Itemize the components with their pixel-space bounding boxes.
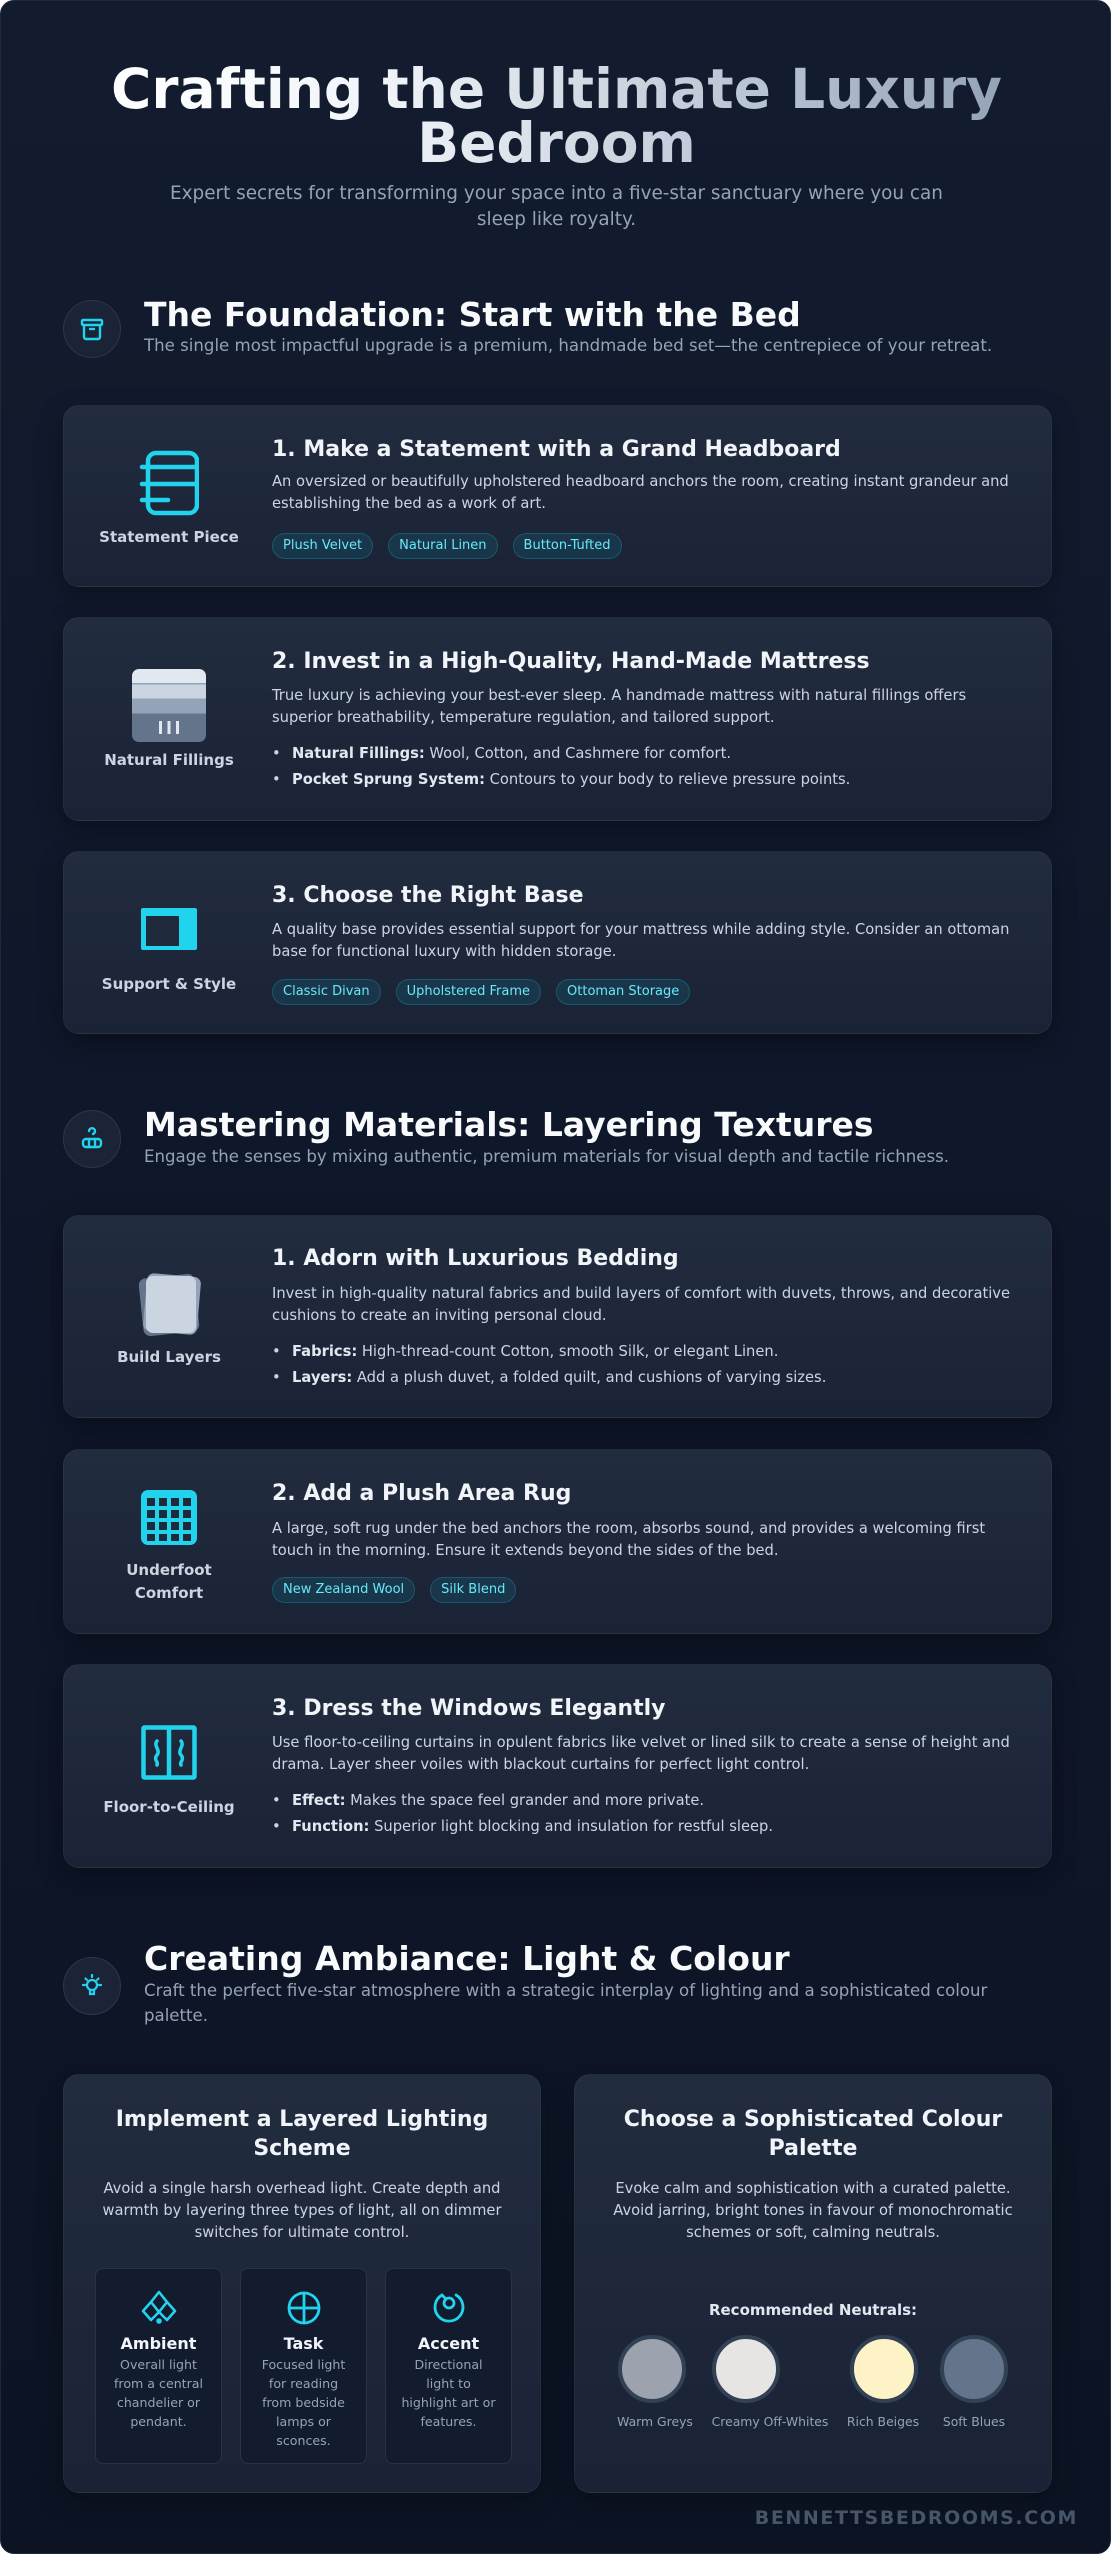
icon: section 1 archive box <box>63 300 121 358</box>
card title: 2. Invest in a High-Quality, Hand-Made Mattress <box>272 649 870 674</box>
heading: section 3: Creating Ambiance: Light & Colour <box>144 1939 790 1978</box>
panel title: Choose a Sophisticated Colour <box>624 2107 1002 2132</box>
label: Support & Style <box>102 975 236 993</box>
swatch: soft blues <box>940 2335 1008 2403</box>
text: section 2 subtitle: Engage the senses by mixing authentic, premium materials for visual depth and tactile richness. <box>144 1147 949 1166</box>
text: features. <box>420 2414 477 2429</box>
description: superior breathability, temperature regulation, and tailored support. <box>272 709 775 726</box>
text: section 3 subtitle: Craft the perfect five-star atmosphere with a strategic interplay of lighting and a sophisticated colour <box>144 1981 987 2000</box>
card title: 1. Adorn with Luxurious Bedding <box>272 1246 679 1271</box>
swatch: warm greys <box>618 2335 686 2403</box>
tags: Plush Velvet <box>283 538 362 553</box>
bullets <box>274 1343 826 1386</box>
description <box>272 1734 1010 1773</box>
icon: rug <box>141 1490 197 1545</box>
label: Ambient <box>121 2334 196 2353</box>
panel description: Avoid a single harsh overhead light. Create depth and <box>104 2180 500 2197</box>
subtitle <box>170 183 943 230</box>
card title: 3. Choose the Right Base <box>272 883 584 908</box>
label: Comfort <box>135 1584 203 1602</box>
icon: section 2 <box>63 1110 121 1168</box>
panel description <box>102 2180 502 2241</box>
text: from a central <box>114 2376 203 2391</box>
tags <box>272 1577 516 1603</box>
bullets: Fabrics: High-thread-count Cotton, smooth Silk, or elegant Linen. <box>292 1343 778 1360</box>
card: mattress <box>63 617 1052 821</box>
description: touch in the morning. Ensure it extends beyond the sides of the bed. <box>272 1542 779 1559</box>
panel description: switches for ultimate control. <box>195 2224 409 2241</box>
label: Underfoot <box>126 1561 212 1579</box>
bullets <box>274 745 850 788</box>
text: chandelier or <box>117 2395 200 2410</box>
label: Natural Fillings <box>104 751 234 769</box>
text: light to <box>426 2376 471 2391</box>
description <box>272 1520 985 1559</box>
card: base <box>63 851 1052 1034</box>
swatch: rich beiges <box>850 2335 918 2403</box>
icon: ambient <box>142 2290 176 2324</box>
subtitle: sleep like royalty. <box>477 209 636 230</box>
description: An oversized or beautifully upholstered headboard anchors the room, creating instant grandeur and <box>272 473 1009 490</box>
card title: 3. Dress the Windows Elegantly <box>272 1696 666 1721</box>
text: section 3 subtitle <box>144 1981 988 2025</box>
swatch labels: Warm Greys <box>617 2414 693 2429</box>
swatch labels: Rich Beiges <box>847 2414 919 2429</box>
panel title: Implement a Layered Lighting <box>116 2107 488 2132</box>
card: windows <box>63 1664 1052 1868</box>
description: Invest in high-quality natural fabrics and build layers of comfort with duvets, throws, and decorative <box>272 1285 1010 1302</box>
panel title: Palette <box>769 2136 857 2161</box>
tags: Silk Blend <box>441 1582 505 1597</box>
description <box>272 687 966 726</box>
label: Accent <box>418 2334 479 2353</box>
heading: section 1: The Foundation: Start with the Bed <box>144 295 801 334</box>
description: drama. Layer sheer voiles with blackout curtains for perfect light control. <box>272 1756 809 1773</box>
description <box>272 1285 1010 1324</box>
card: bedding <box>63 1215 1052 1418</box>
text: for reading <box>269 2376 338 2391</box>
text: Directional <box>414 2357 483 2372</box>
icon: layers <box>138 1273 201 1336</box>
panel title: Scheme <box>253 2136 351 2161</box>
description: establishing the bed as a work of art. <box>272 495 546 512</box>
panel: colour palette <box>574 2074 1052 2493</box>
description: Use floor-to-ceiling curtains in opulent fabrics like velvet or lined silk to create a sense of height and <box>272 1734 1010 1751</box>
bullets: Pocket Sprung System: Contours to your body to relieve pressure points. <box>292 771 850 788</box>
icon: curtains <box>141 1725 197 1780</box>
tags <box>272 979 690 1005</box>
tags: New Zealand Wool <box>283 1582 404 1597</box>
icon: accent <box>434 2294 464 2322</box>
card: headboard <box>63 405 1052 587</box>
text: section 1 subtitle: The single most impactful upgrade is a premium, handmade bed set—the centrepiece of your retreat. <box>144 336 992 355</box>
swatch labels <box>617 2414 1005 2429</box>
text: section 3 subtitle: palette. <box>144 2006 208 2025</box>
subtitle: Expert secrets for transforming your space into a five-star sanctuary where you can <box>170 183 943 204</box>
title: Crafting the Ultimate Luxury <box>111 57 1002 121</box>
panel description <box>613 2180 1013 2241</box>
card: rug <box>63 1449 1052 1634</box>
icon: mattress <box>132 669 206 742</box>
title <box>111 57 1002 175</box>
panel title <box>624 2107 1002 2161</box>
tags: Upholstered Frame <box>407 984 530 999</box>
label: Task <box>284 2334 323 2353</box>
swatch labels: Creamy Off-Whites <box>712 2414 828 2429</box>
bullets: Layers: Add a plush duvet, a folded quilt, and cushions of varying sizes. <box>292 1369 826 1386</box>
description: cushions to create an inviting personal cloud. <box>272 1307 607 1324</box>
text: Overall light <box>120 2357 197 2372</box>
icon: base <box>141 908 197 950</box>
description: True luxury is achieving your best-ever sleep. A handmade mattress with natural fillings offers <box>272 687 966 704</box>
bullets: Function: Superior light blocking and insulation for restful sleep. <box>292 1818 773 1835</box>
text: Focused light <box>262 2357 345 2372</box>
text: lamps or <box>276 2414 331 2429</box>
bullets <box>274 1792 773 1835</box>
heading: section 2: Mastering Materials: Layering Textures <box>144 1105 874 1144</box>
card title: 2. Add a Plush Area Rug <box>272 1481 571 1506</box>
panel: lighting <box>63 2074 541 2493</box>
panel description: warmth by layering three types of light, all on dimmer <box>102 2202 502 2219</box>
sub-card: ambient <box>95 2268 222 2464</box>
label: Statement Piece <box>99 528 239 546</box>
sub-card: accent <box>385 2268 512 2464</box>
label <box>126 1561 212 1602</box>
icon: headboard <box>140 450 199 516</box>
text <box>114 2357 203 2429</box>
footer brand: BENNETTSBEDROOMS.COM <box>755 2507 1078 2529</box>
description: A large, soft rug under the bed anchors the room, absorbs sound, and provides a welcoming first <box>272 1520 985 1537</box>
tags: Button-Tufted <box>524 538 610 553</box>
title: Bedroom <box>417 111 696 175</box>
sub-card: task <box>240 2268 367 2464</box>
card title: 1. Make a Statement with a Grand Headboard <box>272 437 841 462</box>
panel title <box>116 2107 488 2161</box>
label: recommended neutrals: Recommended Neutrals: <box>709 2301 917 2319</box>
text <box>401 2357 496 2429</box>
icon: task <box>288 2292 320 2324</box>
description: A quality base provides essential support for your mattress while adding style. Consider an ottoman <box>272 921 1009 938</box>
panel description: Avoid jarring, bright tones in favour of monochromatic <box>613 2202 1013 2219</box>
swatch labels: Soft Blues <box>943 2414 1005 2429</box>
icon: section 3 lightbulb <box>63 1957 121 2015</box>
description: base for functional luxury with hidden storage. <box>272 943 616 960</box>
text <box>262 2357 345 2448</box>
tags: Classic Divan <box>283 984 370 999</box>
panel description: Evoke calm and sophistication with a curated palette. <box>615 2180 1011 2197</box>
label: Build Layers <box>117 1348 221 1366</box>
text: sconces. <box>276 2433 331 2448</box>
bullets: Effect: Makes the space feel grander and more private. <box>292 1792 704 1809</box>
text: highlight art or <box>401 2395 496 2410</box>
swatch: creamy off-whites <box>712 2335 780 2403</box>
text: from bedside <box>262 2395 345 2410</box>
panel description: schemes or soft, calming neutrals. <box>686 2224 940 2241</box>
description <box>272 473 1009 512</box>
tags <box>272 533 622 559</box>
description <box>272 921 1009 960</box>
bullets: Natural Fillings: Wool, Cotton, and Cashmere for comfort. <box>292 745 731 762</box>
tags: Ottoman Storage <box>567 984 679 999</box>
label: Floor-to-Ceiling <box>103 1798 235 1816</box>
tags: Natural Linen <box>399 538 487 553</box>
text: pendant. <box>130 2414 187 2429</box>
